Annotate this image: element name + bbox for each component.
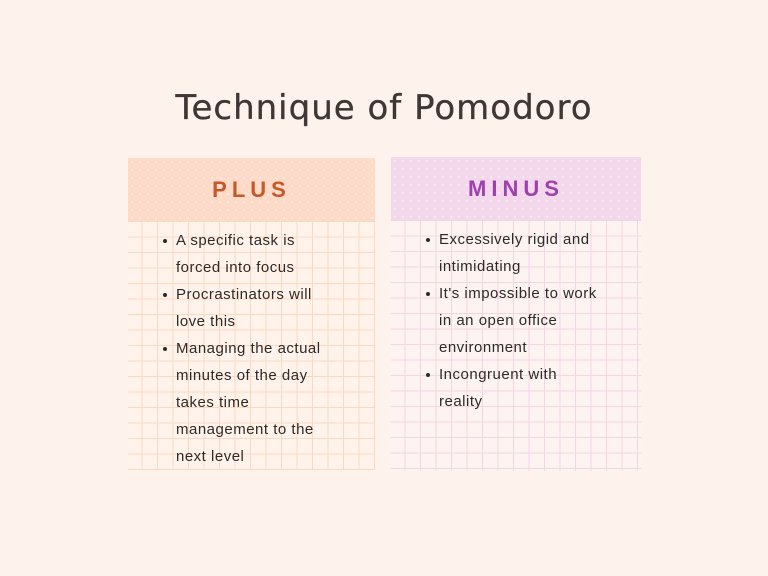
list: plus items: A specific task is <box>176 232 295 249</box>
list: minus items: environment <box>439 339 527 356</box>
list: minus items <box>391 220 641 471</box>
list: minus items: in an open office <box>439 312 557 329</box>
list: plus items: Procrastinators will <box>176 286 312 303</box>
header: minus <box>391 157 641 220</box>
header: plus: PLUS <box>212 176 291 202</box>
list: plus items: management to the <box>176 421 314 438</box>
list: minus items: It's impossible to work <box>439 285 597 302</box>
list: plus items: next level <box>176 448 244 465</box>
list: plus items: minutes of the day <box>176 367 308 384</box>
list: minus items: Incongruent with <box>439 366 557 383</box>
list: minus items: Excessively rigid and <box>439 231 590 248</box>
header: plus <box>128 158 375 221</box>
list: minus items: reality <box>439 393 483 410</box>
list: minus items: intimidating <box>439 258 521 275</box>
panel: plus <box>128 158 375 470</box>
list: plus items <box>128 221 375 470</box>
header: minus: MINUS <box>468 176 564 200</box>
list: plus items: takes time <box>176 394 249 411</box>
panel: minus <box>391 157 641 471</box>
list: plus items: forced into focus <box>176 259 295 276</box>
title: Technique of Pomodoro <box>175 88 592 128</box>
list: plus items: love this <box>176 313 236 330</box>
list: plus items: Managing the actual <box>176 340 321 357</box>
